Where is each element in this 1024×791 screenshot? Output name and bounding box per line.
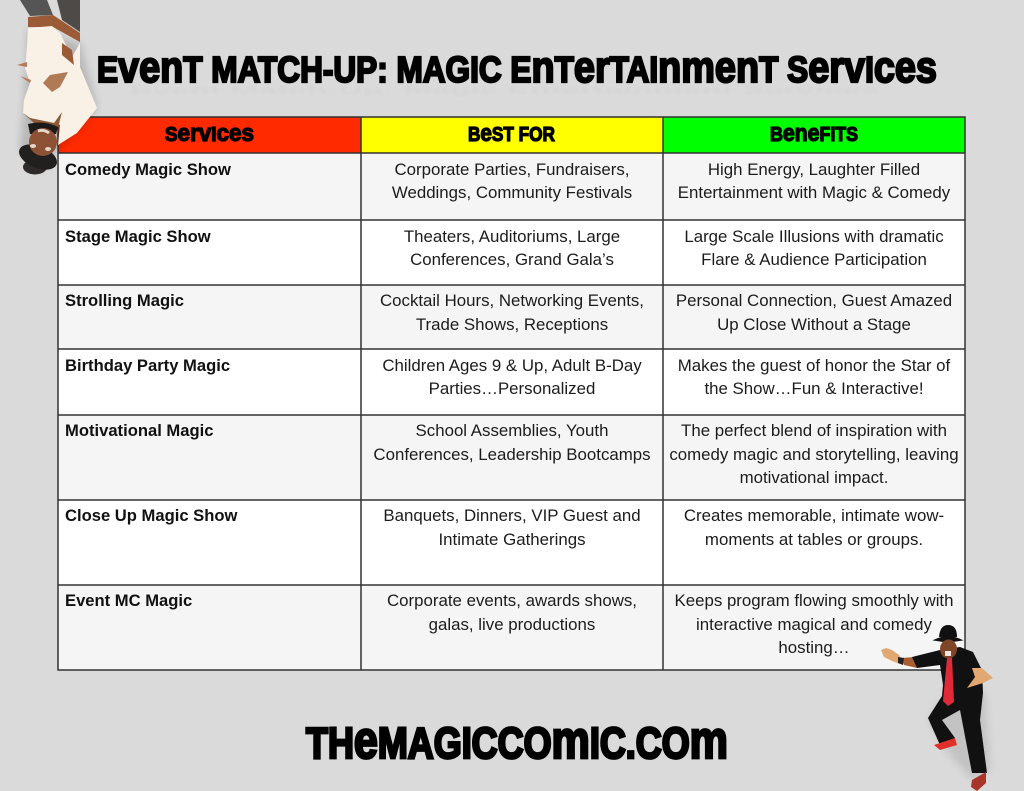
row: close up magic show xyxy=(65,506,944,549)
row: strolling magic xyxy=(65,291,952,334)
row: event mc magic xyxy=(65,591,953,657)
row: motivational magic: Conferences, Leadership Bootcamps xyxy=(373,445,651,464)
icon: magician pointing xyxy=(881,625,993,791)
row: comedy magic show: High Energy, Laughter Filled xyxy=(708,160,920,179)
row: birthday party magic: Makes the guest of honor the Star of xyxy=(678,356,951,375)
row backgrounds xyxy=(58,153,965,670)
row: event mc magic: Event MC Magic xyxy=(65,591,192,610)
services table xyxy=(58,117,965,670)
row: strolling magic: Trade Shows, Receptions xyxy=(416,315,608,334)
icon: upside-down magician xyxy=(15,0,97,175)
row: motivational magic: The perfect blend of inspiration with xyxy=(681,421,947,440)
row: comedy magic show xyxy=(65,160,951,202)
row: birthday party magic: Children Ages 9 & Up, Adult B-Day xyxy=(382,356,642,375)
row: close up magic show: Intimate Gatherings xyxy=(438,530,586,549)
row: stage magic show: Conferences, Grand Gala’s xyxy=(410,250,614,269)
row: close up magic show: Close Up Magic Show xyxy=(65,506,238,525)
row: close up magic show: Creates memorable, intimate wow- xyxy=(684,506,944,525)
row: birthday party magic: Birthday Party Magic xyxy=(65,356,230,375)
row: event mc magic: hosting… xyxy=(778,638,850,657)
row: comedy magic show: Weddings, Community Festivals xyxy=(392,183,632,202)
row: birthday party magic: the Show…Fun & Interactive! xyxy=(704,379,924,398)
row: stage magic show: Stage Magic Show xyxy=(65,227,211,246)
row: event mc magic: Corporate events, awards shows, xyxy=(387,591,637,610)
row: comedy magic show: Entertainment with Magic & Comedy xyxy=(678,183,951,202)
row: close up magic show: moments at tables or groups. xyxy=(705,530,923,549)
header: benefits: BeneFITS xyxy=(770,120,858,147)
row: strolling magic: Strolling Magic xyxy=(65,291,184,310)
row: motivational magic: School Assemblies, Youth xyxy=(416,421,608,440)
row: stage magic show xyxy=(65,227,944,269)
header: best for: BeST FOR xyxy=(468,120,555,147)
row: strolling magic: Personal Connection, Guest Amazed xyxy=(676,291,952,310)
row: motivational magic: Motivational Magic xyxy=(65,421,213,440)
row: event mc magic: Keeps program flowing smoothly with xyxy=(675,591,953,610)
row: close up magic show: Banquets, Dinners, VIP Guest and xyxy=(383,506,641,525)
table header xyxy=(58,117,965,153)
footer website: THeMAGICCOmIC.COm xyxy=(306,711,728,770)
row: event mc magic: interactive magical and comedy xyxy=(696,615,933,634)
title: EvenT MATCH-UP: MAGIC EnTerTAInmenT ServIces xyxy=(97,44,937,92)
header: services: ServIces xyxy=(165,120,254,147)
row: stage magic show: Large Scale Illusions with dramatic xyxy=(684,227,944,246)
row: motivational magic xyxy=(65,421,959,487)
row: comedy magic show: Comedy Magic Show xyxy=(65,160,231,179)
row: motivational magic: motivational impact. xyxy=(740,468,888,487)
row: strolling magic: Cocktail Hours, Networking Events, xyxy=(380,291,644,310)
row: birthday party magic: Parties…Personalized xyxy=(429,379,595,398)
row: event mc magic: galas, live productions xyxy=(429,615,595,634)
row: comedy magic show: Corporate Parties, Fundraisers, xyxy=(395,160,629,179)
row: stage magic show: Flare & Audience Participation xyxy=(701,250,927,269)
row: motivational magic: comedy magic and storytelling, leaving xyxy=(669,445,959,464)
row: birthday party magic xyxy=(65,356,951,398)
row: strolling magic: Up Close Without a Stage xyxy=(717,315,911,334)
row: stage magic show: Theaters, Auditoriums, Large xyxy=(404,227,620,246)
